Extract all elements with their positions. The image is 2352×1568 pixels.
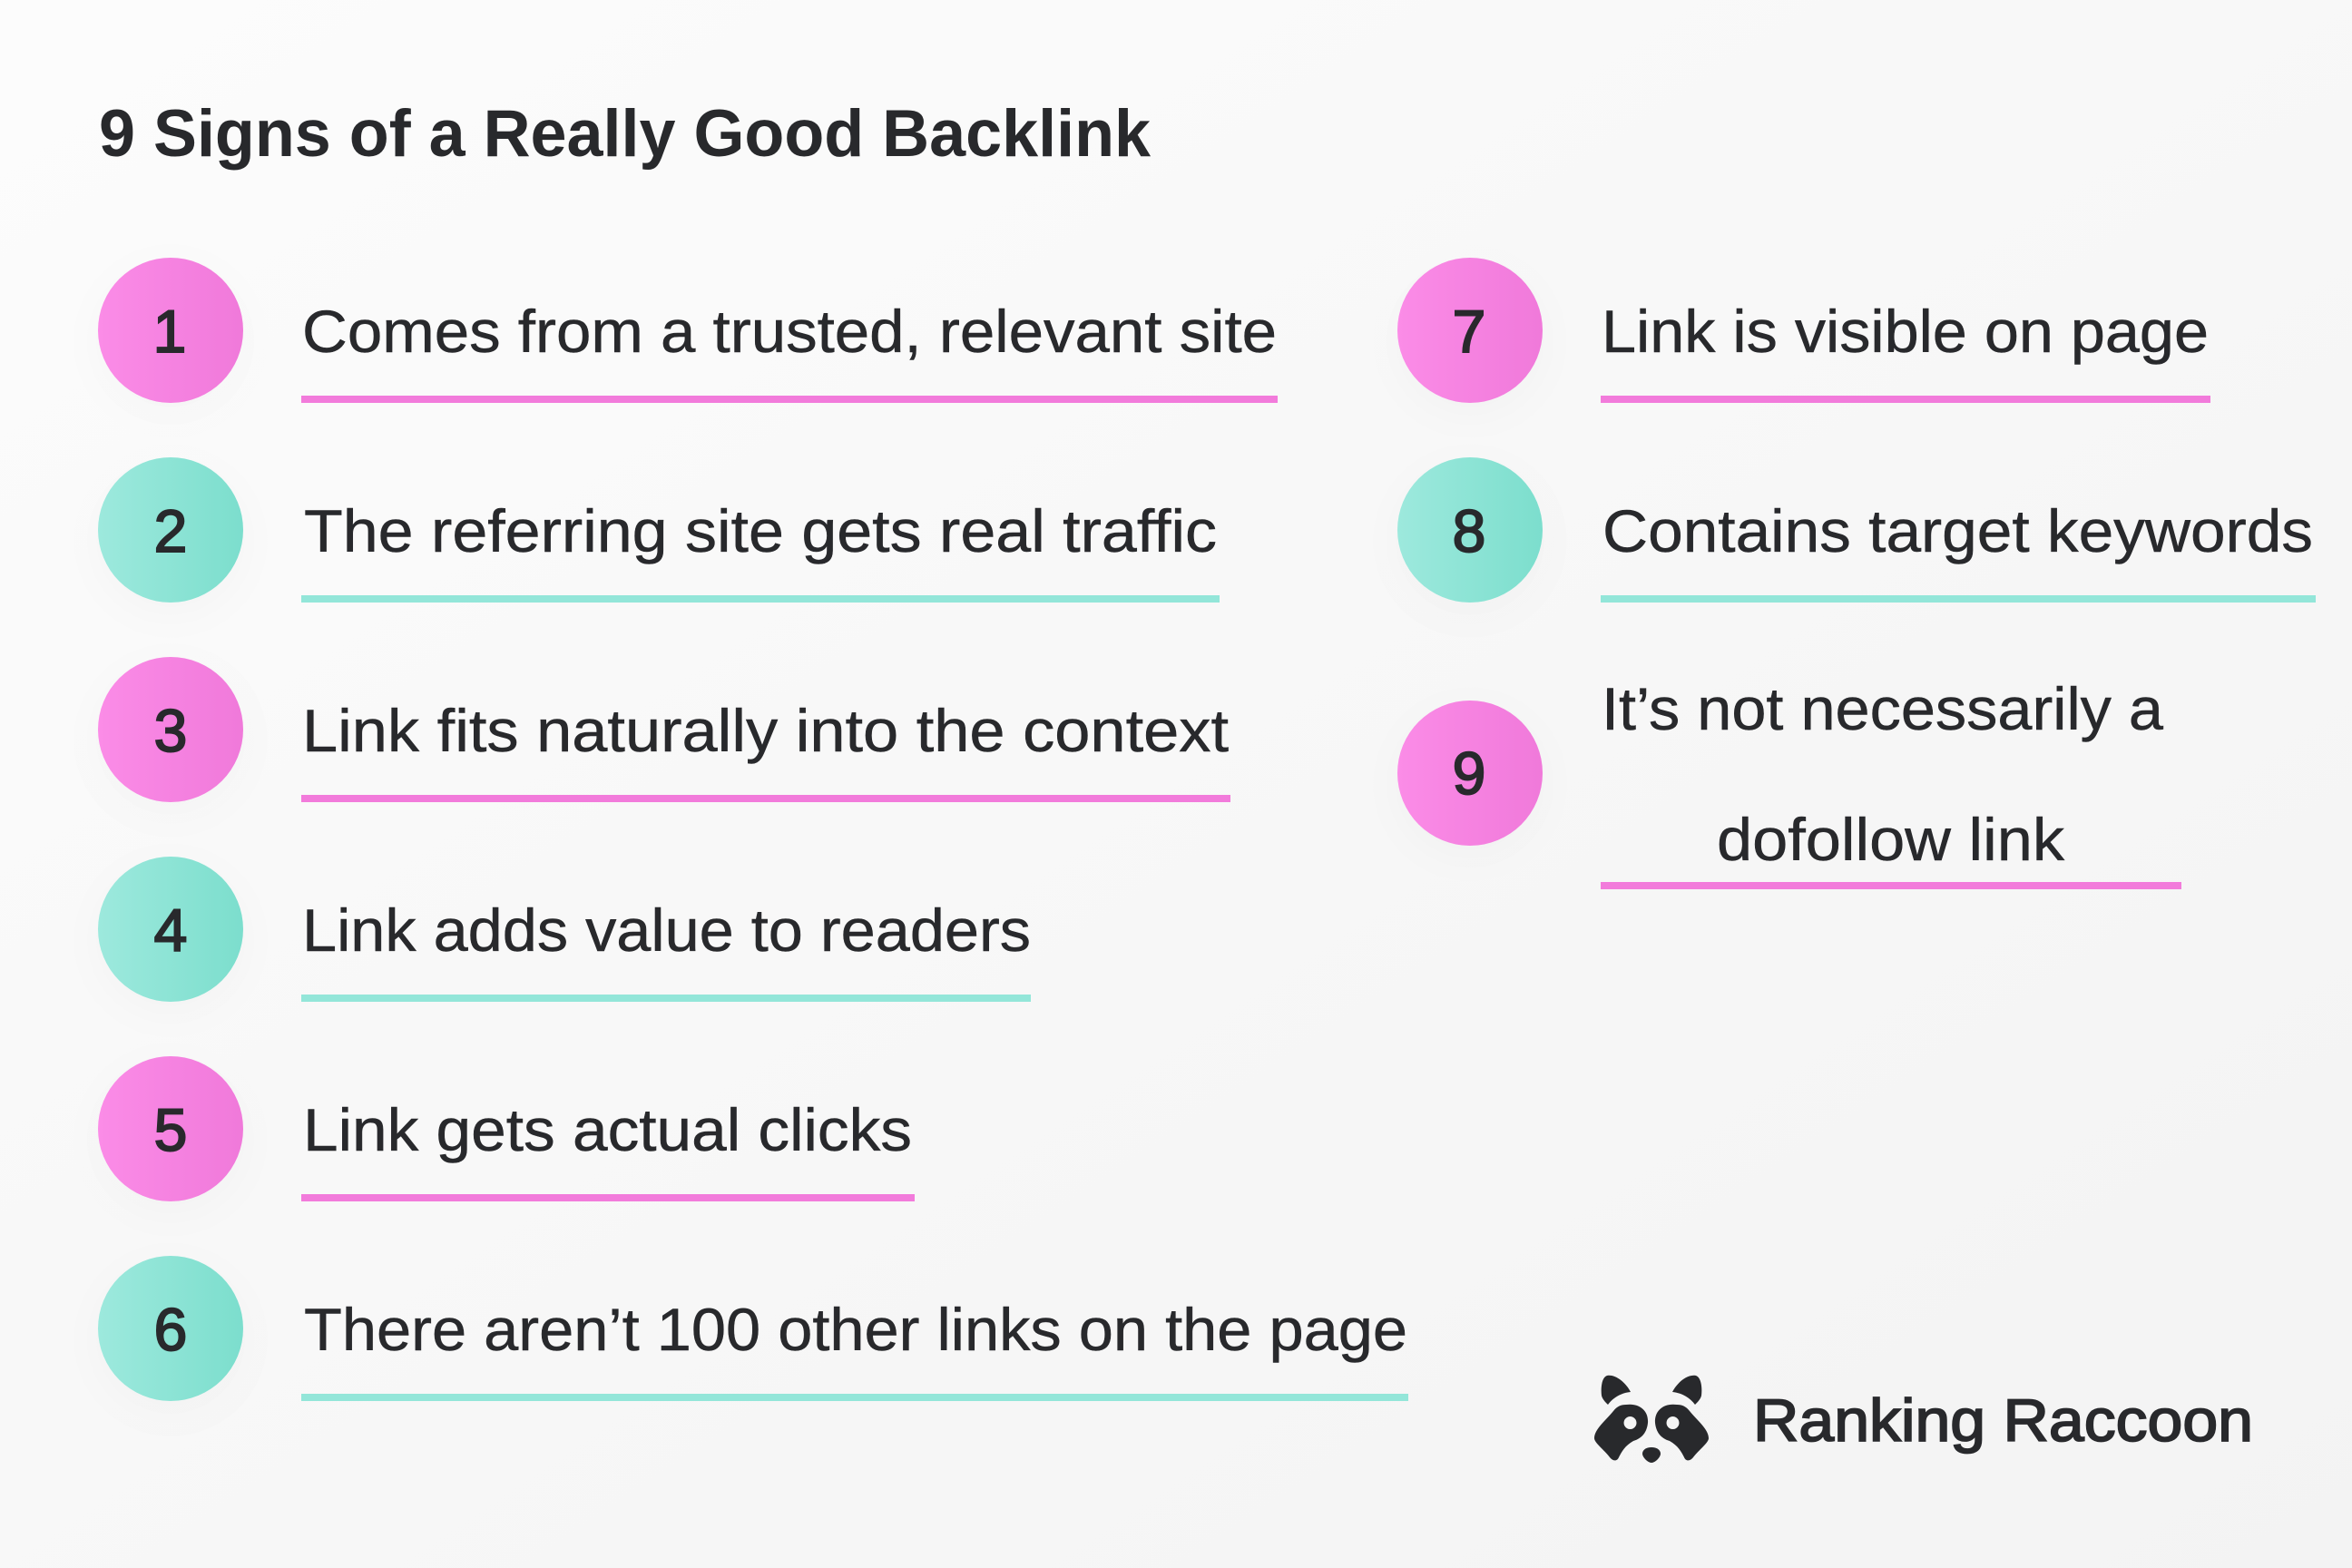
underline 4 <box>301 995 1031 1002</box>
number badge 8: 8 <box>1453 497 1485 564</box>
number badge 7: 7 <box>1453 298 1485 365</box>
label 5: Link gets actual clicks <box>303 1096 912 1163</box>
number badge 9 <box>1397 701 1543 846</box>
item 2 <box>98 457 1220 603</box>
number badge 1 <box>98 258 243 403</box>
number badge 6 <box>98 1256 243 1401</box>
number badge 8 <box>1397 457 1543 603</box>
item 6 <box>98 1256 1408 1401</box>
number badge 3: 3 <box>154 697 187 764</box>
label 9: dofollow link <box>1717 806 2065 873</box>
item 9 <box>1397 675 2181 889</box>
label 1: Comes from a trusted, relevant site <box>302 298 1277 365</box>
number badge 5 <box>98 1056 243 1201</box>
label 8: Contains target keywords <box>1602 497 2313 564</box>
logo wordmark: Ranking Raccoon <box>1753 1387 2253 1454</box>
label 7: Link is visible on page <box>1602 298 2209 365</box>
number badge 1: 1 <box>153 298 186 365</box>
underline 9 <box>1601 882 2181 889</box>
label 9: It’s not necessarily a <box>1602 675 2163 742</box>
icon: raccoon face <box>1594 1376 1709 1463</box>
label 2: The referring site gets real traffic <box>304 497 1217 564</box>
underline 1 <box>301 396 1278 403</box>
item 5 <box>98 1056 915 1201</box>
item 3 <box>98 657 1230 802</box>
number badge 2 <box>98 457 243 603</box>
number badge 4 <box>98 857 243 1002</box>
number badge 7 <box>1397 258 1543 403</box>
underline 3 <box>301 795 1230 802</box>
item 7 <box>1397 258 2210 403</box>
logo: Ranking Raccoon <box>1594 1376 2253 1463</box>
underline 2 <box>301 595 1220 603</box>
item 8 <box>1397 457 2316 603</box>
number badge 4: 4 <box>154 897 187 964</box>
item 1 <box>98 258 1278 403</box>
underline 5 <box>301 1194 915 1201</box>
label 3: Link fits naturally into the context <box>302 697 1229 764</box>
number badge 3 <box>98 657 243 802</box>
item 4 <box>98 857 1031 1002</box>
number badge 9: 9 <box>1453 740 1485 807</box>
label 9 <box>1602 675 2163 873</box>
label 6: There aren’t 100 other links on the page <box>304 1296 1407 1363</box>
number badge 6: 6 <box>154 1296 187 1363</box>
underline 8 <box>1601 595 2316 603</box>
title: 9 Signs of a Really Good Backlink <box>99 97 1151 171</box>
underline 7 <box>1601 396 2210 403</box>
underline 6 <box>301 1394 1408 1401</box>
number badge 5: 5 <box>154 1096 187 1163</box>
label 4: Link adds value to readers <box>302 897 1031 964</box>
number badge 2: 2 <box>154 497 187 564</box>
